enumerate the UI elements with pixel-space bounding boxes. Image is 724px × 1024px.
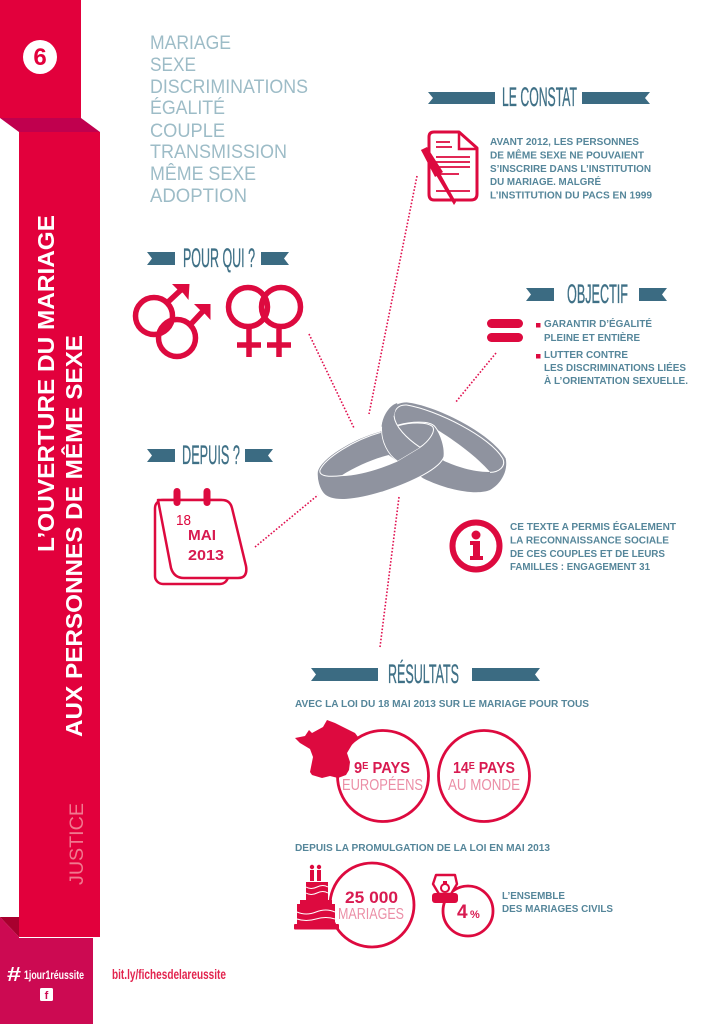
text block: information: LA RECONNAISSANCE SOCIALE [510,534,669,546]
connector: le constat [369,176,417,414]
heading: le constat [428,82,650,112]
stat: 14e pays au monde: AU MONDE [448,777,520,794]
icon: calendar: 2013 [188,547,224,564]
heading: pour qui: POUR QUI ? [183,243,255,273]
heading: résultats [311,659,540,689]
keywords list: MÊME SEXE [150,163,256,185]
heading: objectif: OBJECTIF [567,279,628,309]
stat: 4 percent: 4 [457,902,468,923]
title: L’OUVERTURE DU MARIAGE [33,215,59,552]
icon: information [452,522,500,570]
stat: 4 percent: % [470,909,480,921]
panel: footer tag [0,917,93,1024]
connector: résultats [380,497,399,647]
stat: 25 000 mariages: MARIAGES [338,906,404,923]
stat: 14e pays au monde: 14 [453,760,470,777]
heading: depuis: DEPUIS ? [182,440,240,470]
keywords list: COUPLE [150,121,225,142]
stat: 4 percent [443,886,493,936]
panel: footer tag: # [7,964,21,986]
text block: information: CE TEXTE A PERMIS ÉGALEMENT [510,520,677,533]
keywords list: TRANSMISSION [150,142,287,163]
icon: equal sign [487,319,523,342]
stat: 14e pays au monde [438,730,530,822]
text block: le constat: S’INSCRIRE DANS L’INSTITUTION [490,163,651,175]
text block: le constat: AVANT 2012, LES PERSONNES [490,136,639,148]
icon: ring box [432,875,458,903]
stat: 25 000 mariages [330,863,414,947]
panel: footer tag: 1jour1réussite [24,968,84,982]
stat: 9e pays européens: PAYS [368,760,410,777]
text block: le constat: DE MÊME SEXE NE POUVAIENT [490,148,645,162]
text block: objectif: GARANTIR D’ÉGALITÉ [544,317,652,330]
heading: objectif [526,279,667,309]
subheading: promulgation: DEPUIS LA PROMULGATION DE LA LOI EN MAI 2013 [295,842,550,854]
text block: objectif [536,317,688,387]
text block: le constat: DU MARIAGE. MALGRÉ [490,175,601,188]
icon: calendar: 18 [176,512,191,529]
stat: 9e pays européens: 9 [354,760,363,777]
panel: footer tag: f [45,990,49,1002]
category label: JUSTICE [67,803,88,885]
icon: wedding cake [294,865,339,930]
heading: depuis [147,440,273,470]
icon: sheet number 6 [23,40,57,74]
icon: document and pen [421,132,477,205]
keywords list [150,33,308,207]
stat: 9e pays européens [295,720,428,822]
stat: 9e pays européens: E [362,761,369,772]
icon: calendar: MAI [188,527,216,544]
heading: pour qui [147,243,289,273]
icon: female couple symbol [228,288,300,357]
connector: objectif [455,353,496,403]
keywords list: DISCRIMINATIONS [150,77,308,98]
text block: information [510,520,677,573]
text block: le constat: L’INSTITUTION DU PACS EN 1999 [490,190,652,202]
text block: information: FAMILLES : ENGAGEMENT 31 [510,561,650,573]
stat: 25 000 mariages: 25 000 [345,889,398,907]
subheading: la loi: AVEC LA LOI DU 18 MAI 2013 SUR LE MARIAGE POUR TOUS [295,698,589,710]
connector: depuis [255,495,318,547]
title [33,215,87,737]
icon: sheet number 6: 6 [33,44,47,71]
text block: le constat [490,136,652,202]
keywords list: ÉGALITÉ [150,98,225,119]
text block: mariages civils [502,890,613,915]
text block: objectif: À L’ORIENTATION SEXUELLE. [544,374,688,387]
text block: objectif: LUTTER CONTRE [544,349,628,361]
icon: male couple symbol [136,284,210,356]
icon: wedding rings [317,402,506,499]
stat: 14e pays au monde: E [469,761,475,772]
footer link: bit.ly/fichesdelareussite [112,967,226,982]
text block: information: DE CES COUPLES ET DE LEURS [510,548,665,560]
text block: mariages civils: DES MARIAGES CIVILS [502,903,613,915]
panel: left red banner [0,0,100,937]
stat: 9e pays européens: EUROPÉENS [342,775,423,794]
keywords list: MARIAGE [150,33,231,54]
text block: objectif: LES DISCRIMINATIONS LIÉES [544,361,686,374]
text block: objectif: PLEINE ET ENTIÈRE [544,331,640,344]
text block: mariages civils: L’ENSEMBLE [502,890,565,902]
icon: calendar [155,488,246,584]
stat: 14e pays au monde: PAYS [475,760,515,777]
connector: pour qui [309,334,354,428]
keywords list: SEXE [150,55,196,76]
heading: résultats: RÉSULTATS [388,659,459,689]
heading: le constat: LE CONSTAT [502,82,577,112]
keywords list: ADOPTION [150,186,247,207]
title: AUX PERSONNES DE MÊME SEXE [60,335,87,737]
